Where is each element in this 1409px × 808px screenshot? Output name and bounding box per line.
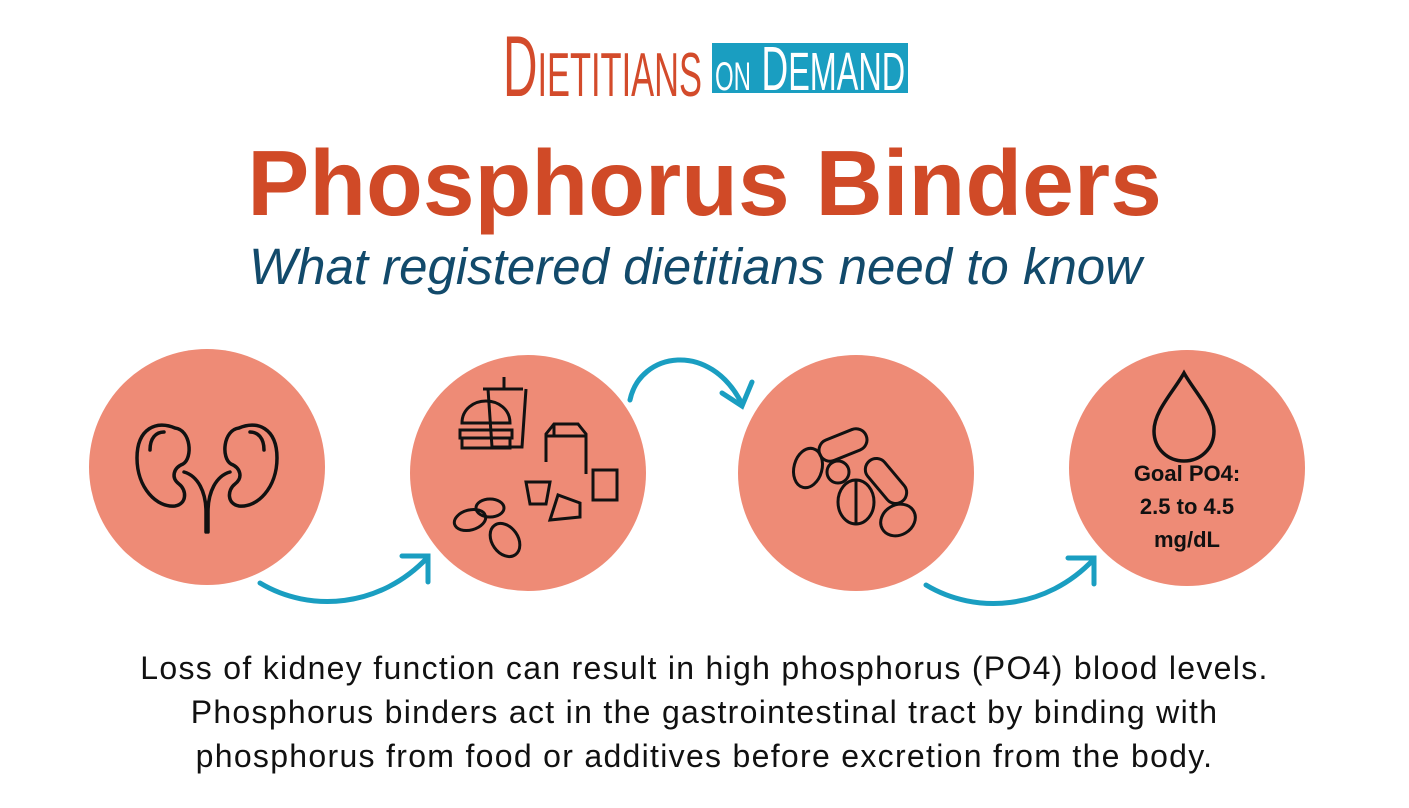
logo bbox=[503, 19, 908, 115]
arrow 2 bbox=[630, 360, 752, 406]
circle 4: goal bbox=[1069, 350, 1305, 586]
body text: Loss of kidney function can result in high phosphorus (PO4) blood levels. bbox=[140, 650, 1269, 686]
logo text: dietitians: DIETITIANS bbox=[503, 19, 702, 115]
arrow 1 bbox=[260, 556, 428, 601]
circle 3: pills bbox=[738, 355, 974, 591]
goal text: Goal PO4: bbox=[1134, 461, 1240, 486]
icon: burger and drink bbox=[460, 377, 526, 448]
arrow 3 bbox=[926, 558, 1094, 603]
icon: beans bbox=[452, 499, 526, 562]
icon: kidneys bbox=[137, 425, 277, 532]
flow diagram: mg/dL bbox=[1154, 527, 1220, 552]
title: Phosphorus Binders bbox=[247, 131, 1162, 235]
icon: water drop bbox=[1154, 373, 1214, 461]
icon: dairy bbox=[526, 424, 617, 520]
body text bbox=[140, 650, 1269, 774]
circle 1: kidneys bbox=[89, 349, 325, 585]
flow diagram: 2.5 to 4.5 bbox=[1140, 494, 1234, 519]
body text: Phosphorus binders act in the gastrointestinal tract by binding with bbox=[191, 694, 1218, 730]
subtitle: What registered dietitians need to know bbox=[249, 238, 1142, 295]
icon: pills bbox=[789, 425, 921, 542]
body text: phosphorus from food or additives before excretion from the body. bbox=[196, 738, 1213, 774]
circle 2: foods bbox=[410, 355, 646, 591]
